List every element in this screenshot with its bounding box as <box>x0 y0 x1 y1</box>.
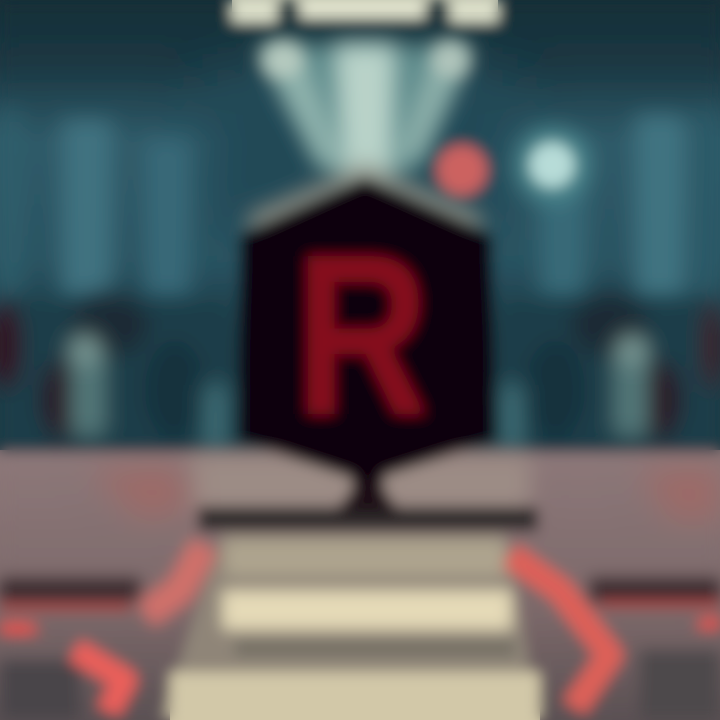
red floor lines <box>0 545 720 712</box>
red orb <box>437 145 487 195</box>
light beams <box>258 42 472 180</box>
red letter R: R <box>295 208 429 464</box>
glow behind shield <box>250 165 480 240</box>
shield <box>238 178 496 482</box>
pale orb <box>516 129 588 201</box>
dark floor bands <box>0 578 720 720</box>
left figures <box>0 293 230 450</box>
central stairs <box>160 535 540 720</box>
wall columns <box>0 110 720 300</box>
right figures <box>500 293 720 450</box>
background wall <box>0 0 720 470</box>
ceiling lights <box>232 0 498 22</box>
floor <box>0 452 720 720</box>
shield stand <box>198 460 538 531</box>
